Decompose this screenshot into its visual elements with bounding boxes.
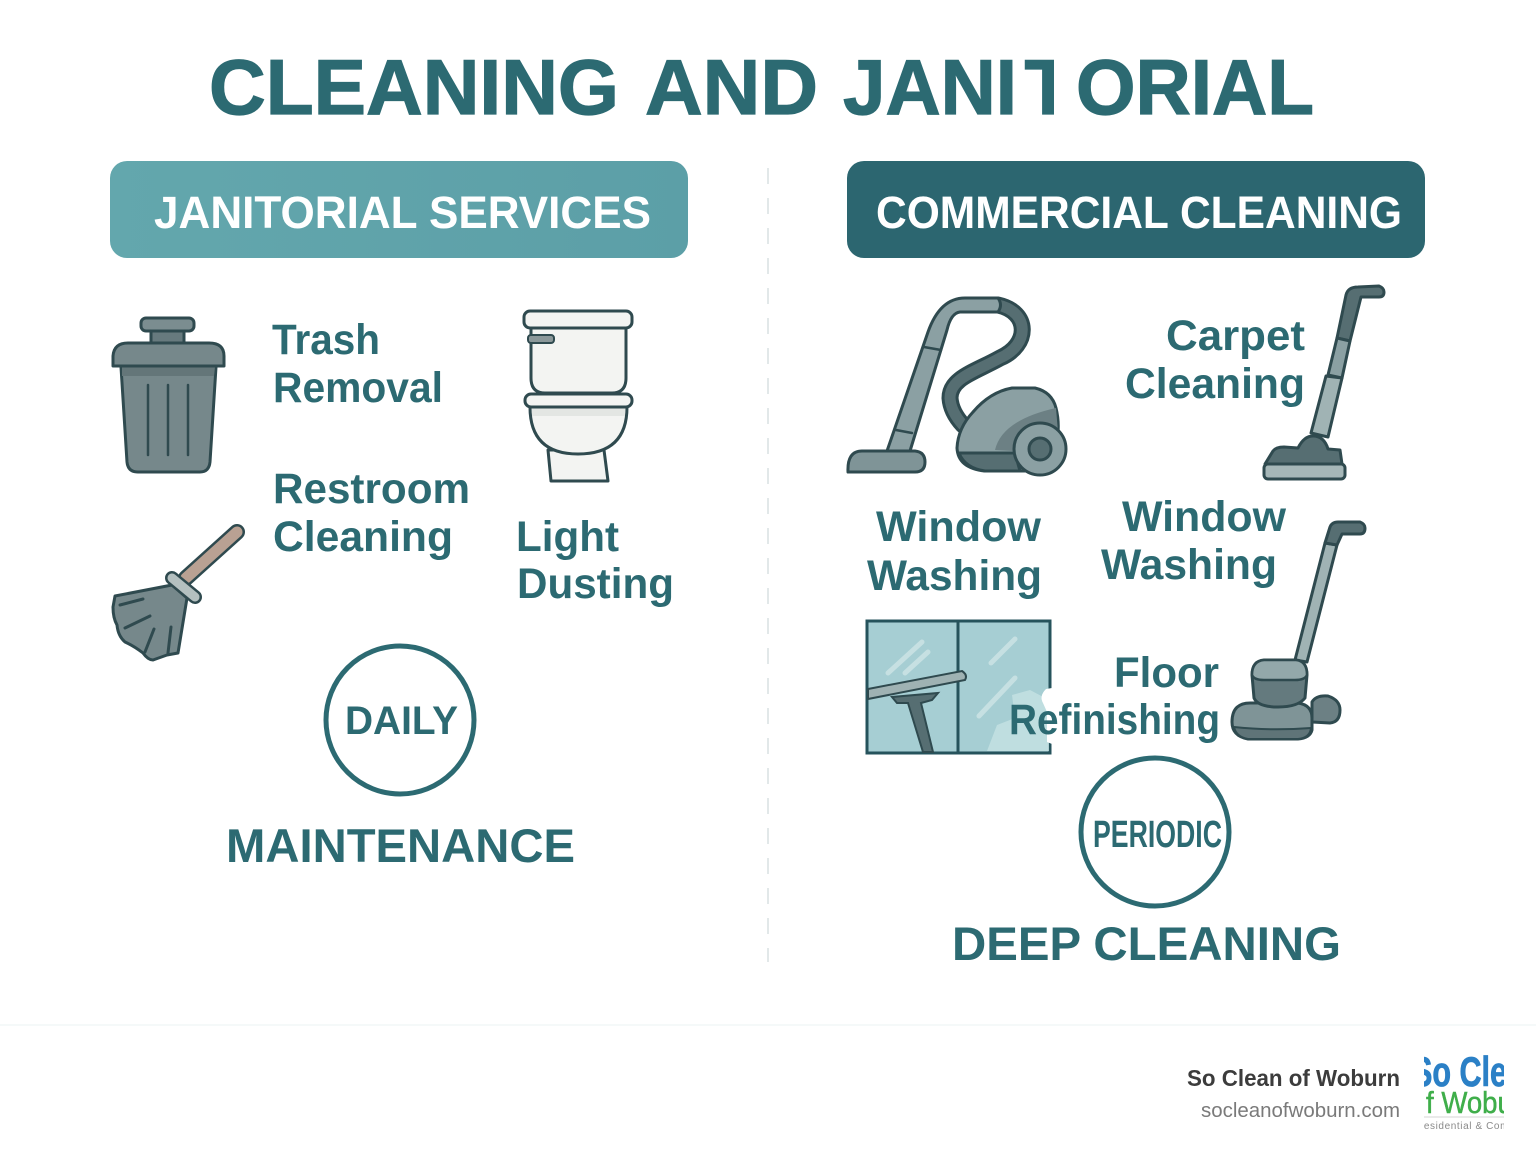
label: carpet cleaning: Cleaning bbox=[1125, 360, 1305, 408]
title: ORIAL bbox=[1076, 43, 1314, 131]
label: window washing right: Window bbox=[1122, 493, 1287, 541]
label: window washing right bbox=[1101, 493, 1287, 589]
label: window washing left: Window bbox=[876, 503, 1042, 551]
label: maintenance: MAINTENANCE bbox=[226, 819, 575, 872]
footer: brand name and website: socleanofwoburn.com bbox=[1201, 1100, 1400, 1122]
heading: commercial cleaning bbox=[847, 161, 1425, 258]
icon: floor machine bbox=[1232, 522, 1365, 739]
label: window washing left bbox=[867, 503, 1042, 600]
label: trash removal: Removal bbox=[273, 364, 443, 412]
label: light dusting: Light bbox=[516, 513, 619, 561]
label: floor refinishing: Floor bbox=[1114, 649, 1219, 697]
title: CLEANING bbox=[209, 43, 619, 131]
label: light dusting bbox=[516, 513, 674, 608]
icon: window with squeegee bbox=[867, 621, 1052, 753]
heading: janitorial services: JANITORIAL SERVICES bbox=[154, 187, 651, 238]
badge: daily bbox=[326, 646, 474, 794]
label: carpet cleaning: Carpet bbox=[1166, 312, 1305, 360]
label: floor refinishing bbox=[1009, 649, 1220, 744]
logo: so clean of woburn bbox=[1424, 1055, 1504, 1129]
label: window washing left: Washing bbox=[867, 552, 1042, 600]
badge: periodic: PERIODIC bbox=[1093, 814, 1222, 856]
label: restroom cleaning: Cleaning bbox=[273, 513, 453, 561]
panel: commercial cleaning bbox=[847, 161, 1425, 970]
badge: daily: DAILY bbox=[345, 699, 458, 743]
label: window washing right: Washing bbox=[1101, 541, 1277, 589]
icon: vacuum cleaner bbox=[848, 298, 1066, 475]
title: T bbox=[1024, 43, 1072, 131]
label: trash removal bbox=[272, 316, 443, 412]
title: AND bbox=[645, 43, 818, 131]
icon: carpet cleaner bbox=[1264, 286, 1384, 479]
icon: trash can bbox=[113, 318, 224, 472]
label: restroom cleaning: Restroom bbox=[273, 465, 470, 513]
label: light dusting: Dusting bbox=[517, 560, 674, 608]
icon: toilet bbox=[524, 311, 632, 481]
logo: so clean of woburn: f Wobur bbox=[1426, 1085, 1522, 1120]
heading: commercial cleaning: COMMERCIAL CLEANING bbox=[876, 187, 1402, 238]
label: carpet cleaning bbox=[1125, 312, 1305, 408]
footer: brand name and website: So Clean of Woburn bbox=[1187, 1065, 1400, 1091]
panel: janitorial services bbox=[110, 161, 688, 872]
footer: brand name and website bbox=[1187, 1065, 1400, 1122]
icon: feather duster bbox=[113, 532, 237, 660]
badge: periodic bbox=[1081, 758, 1229, 906]
label: restroom cleaning bbox=[273, 465, 470, 561]
label: deep cleaning: DEEP CLEANING bbox=[952, 917, 1341, 970]
heading: janitorial services bbox=[110, 161, 688, 258]
title bbox=[212, 59, 1312, 116]
title: JANI bbox=[843, 43, 1017, 131]
label: trash removal: Trash bbox=[272, 316, 380, 364]
label: floor refinishing: Refinishing bbox=[1009, 696, 1220, 744]
